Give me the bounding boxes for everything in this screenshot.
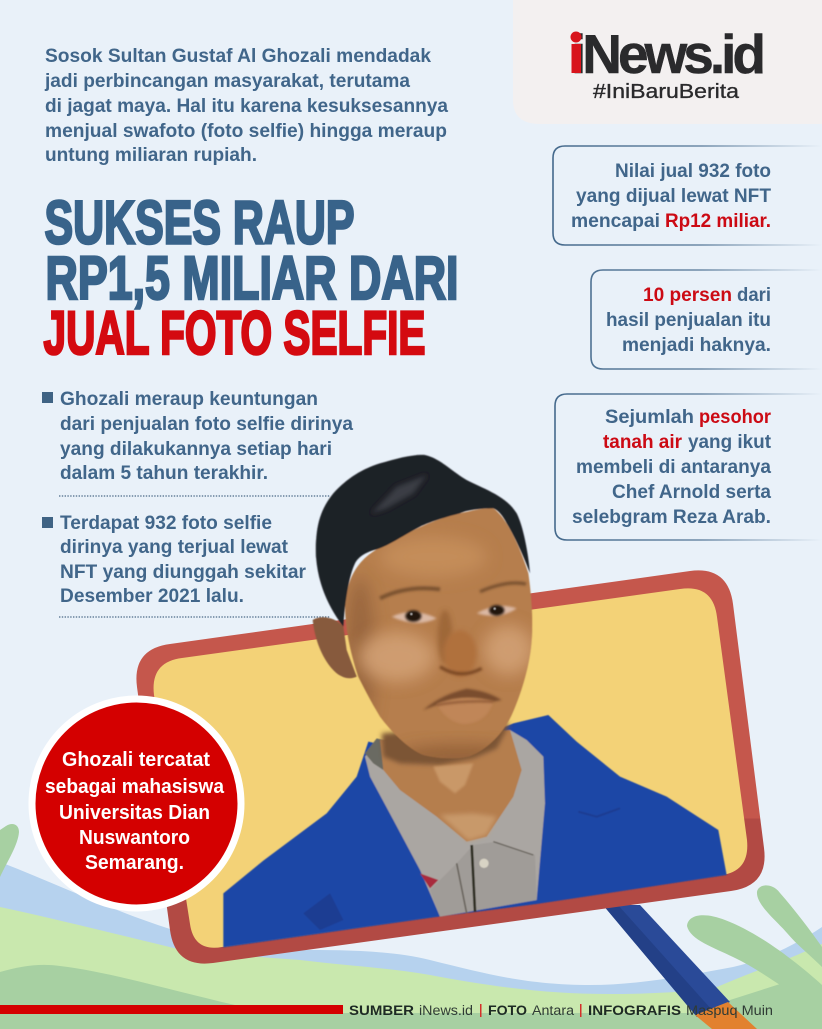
bullet 2: NFT yang diunggah sekitar	[60, 561, 306, 583]
bullet 1	[42, 388, 353, 484]
photo: young man in blue jacket	[223, 455, 727, 947]
intro text: untung miliaran rupiah.	[45, 144, 257, 166]
footer credits: iNews.id	[419, 1003, 473, 1018]
callout: 10 persen: menjadi haknya.	[622, 334, 771, 356]
callout: nilai jual: Rp12 miliar.	[665, 210, 771, 232]
callout: pesohor: Chef Arnold serta	[612, 481, 771, 503]
footer rule	[0, 1005, 343, 1014]
moustache and mouth	[423, 689, 502, 710]
callout: pesohor	[555, 394, 822, 540]
bullet 2: Terdapat 932 foto selfie	[60, 512, 272, 534]
shirt and neck	[365, 723, 545, 917]
intro text: di jagat maya. Hal itu karena kesuksesannya	[45, 95, 448, 117]
callout circle	[32, 699, 241, 908]
footer credits: SUMBER	[349, 1003, 414, 1018]
logo panel	[513, 0, 822, 124]
callout circle: sebagai mahasiswa	[45, 776, 225, 798]
title: JUAL FOTO SELFIE	[44, 299, 426, 367]
bullet 1: yang dilakukannya setiap hari	[60, 438, 332, 460]
callout circle: Semarang.	[85, 852, 184, 874]
callout: 10 persen	[591, 270, 822, 369]
intro text: jadi perbincangan masyarakat, terutama	[44, 70, 410, 92]
callout: pesohor: Sejumlah	[605, 406, 694, 428]
bullet 2	[42, 512, 306, 607]
callout: 10 persen: dari	[737, 284, 771, 306]
title: RP1,5 MILIAR DARI	[46, 244, 458, 312]
intro text: Sosok Sultan Gustaf Al Ghozali mendadak	[45, 45, 431, 67]
bullet 1: dalam 5 tahun terakhir.	[60, 462, 268, 484]
logo: iNews.id: iNews.id	[571, 23, 766, 85]
tagline: #IniBaruBerita	[593, 80, 740, 103]
intro text: menjual swafoto (foto selfie) hingga meraup	[45, 120, 447, 142]
bullet 2: Desember 2021 lalu.	[60, 585, 244, 607]
callout: nilai jual: Nilai jual 932 foto	[615, 160, 771, 182]
photo frame	[136, 570, 765, 964]
bullet 1: Ghozali meraup keuntungan	[60, 388, 318, 410]
jacket	[223, 715, 727, 947]
callout: pesohor: yang ikut	[688, 431, 771, 453]
intro text	[44, 45, 448, 166]
callout: pesohor: tanah air	[603, 431, 682, 453]
footer credits: FOTO	[488, 1003, 527, 1018]
callout: nilai jual: yang dijual lewat NFT	[576, 185, 771, 207]
callout: pesohor: pesohor	[699, 406, 771, 428]
head	[313, 455, 540, 768]
callout: 10 persen: 10 persen	[643, 284, 732, 306]
callout circle: Nuswantoro	[79, 827, 190, 849]
hair	[316, 455, 530, 627]
title	[44, 188, 458, 367]
callout: pesohor: membeli di antaranya	[576, 456, 771, 478]
face	[344, 507, 533, 758]
callout: nilai jual	[553, 146, 822, 245]
eyes	[392, 612, 437, 623]
callout circle: Ghozali tercatat	[62, 749, 210, 771]
callout circle: Universitas Dian	[59, 802, 210, 824]
bullet 1: dari penjualan foto selfie dirinya	[60, 413, 353, 435]
footer credits: Maspuq Muin	[686, 1003, 773, 1018]
brows	[380, 588, 440, 598]
callout: 10 persen: hasil penjualan itu	[606, 309, 771, 331]
selfie stick	[603, 905, 757, 1029]
bullet 2: dirinya yang terjual lewat	[60, 536, 288, 558]
ear	[313, 617, 357, 678]
footer credits: INFOGRAFIS	[588, 1003, 681, 1018]
landscape	[0, 824, 822, 1029]
footer credits: Antara	[532, 1003, 575, 1018]
footer credits	[349, 1003, 773, 1018]
callout: pesohor: selebgram Reza Arab.	[572, 506, 771, 528]
title: SUKSES RAUP	[44, 188, 354, 256]
callout: nilai jual: mencapai	[571, 210, 660, 232]
